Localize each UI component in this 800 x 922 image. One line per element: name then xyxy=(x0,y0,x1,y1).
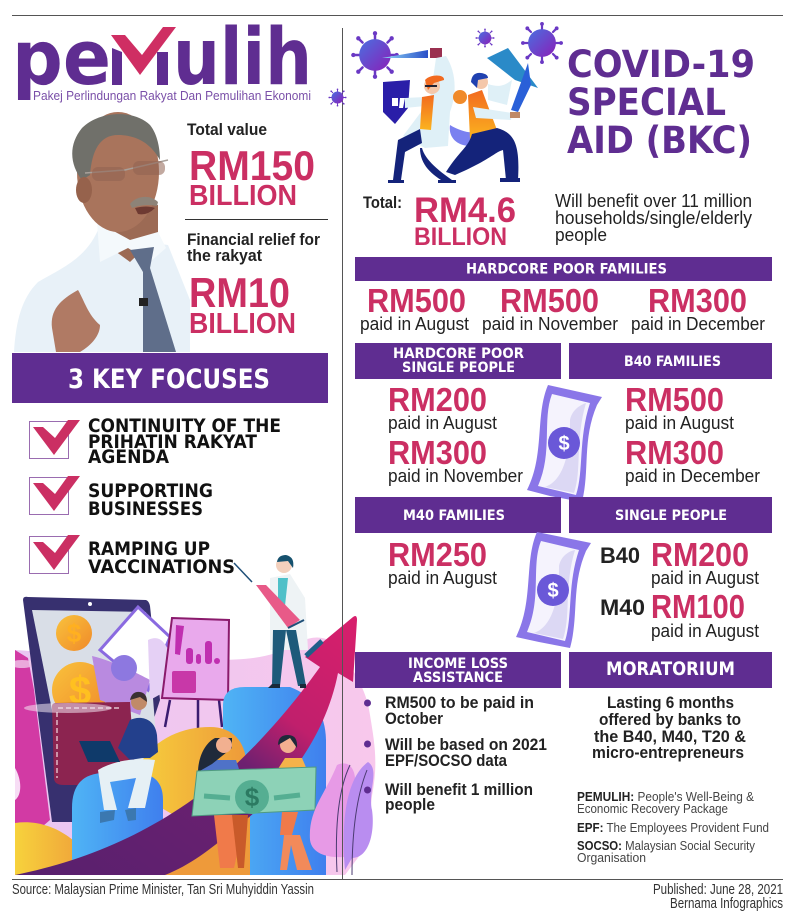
glossary xyxy=(577,789,769,865)
photo: prime minister xyxy=(14,112,190,352)
panel: hardcore poor single people: paid in August xyxy=(388,413,497,433)
title xyxy=(567,43,755,162)
top rule xyxy=(12,15,783,16)
small blue block xyxy=(72,773,163,860)
panel: B40 families: paid in December xyxy=(625,466,760,486)
illustration: doctors fighting the virus xyxy=(382,48,538,183)
focus 2 xyxy=(30,476,213,520)
panel: hardcore poor families: paid in December xyxy=(631,314,765,334)
focus 2: BUSINESSES xyxy=(88,498,203,520)
glossary: SOCSO: Malaysian Social Security xyxy=(577,838,755,853)
total block xyxy=(363,191,516,251)
panel: moratorium: Lasting 6 months xyxy=(607,693,734,712)
panel: income loss assistance: EPF/SOCSO data xyxy=(385,751,507,770)
panel: income loss assistance xyxy=(355,652,561,814)
focus 1: PRIHATIN RAKYAT xyxy=(88,431,257,453)
plants xyxy=(310,763,355,857)
panel: single people: RM100 xyxy=(651,588,745,625)
glossary: PEMULIH: People's Well-Being & xyxy=(577,789,754,804)
panel: single people: paid in August xyxy=(651,568,759,588)
panel: M40 families xyxy=(355,497,561,588)
coins xyxy=(56,615,92,651)
panel: single people: RM200 xyxy=(651,536,749,573)
growth arrow xyxy=(15,616,357,875)
logo: pemulih: pe xyxy=(12,13,111,102)
panel: M40 families: M40 FAMILIES xyxy=(403,508,505,524)
panel: moratorium xyxy=(569,652,772,762)
logo: pemulih xyxy=(12,13,312,103)
financial relief block xyxy=(187,230,320,340)
panel: income loss assistance: Will benefit 1 million xyxy=(385,780,533,799)
panel: income loss assistance: ASSISTANCE xyxy=(413,670,503,686)
title: AID (BKC) xyxy=(567,119,752,162)
glossary: Organisation xyxy=(577,850,646,865)
financial relief block: the rakyat xyxy=(187,246,262,265)
wallet xyxy=(52,702,136,785)
panel: hardcore poor families: RM500 xyxy=(500,282,599,319)
panel: single people: B40 xyxy=(600,543,640,568)
glossary: EPF: The Employees Provident Fund xyxy=(577,820,769,835)
panel: M40 families: paid in August xyxy=(388,568,497,588)
panel: hardcore poor single people: RM300 xyxy=(388,434,487,471)
panel: income loss assistance: people xyxy=(385,795,435,814)
illustration: growth scene with tablet, wallet, arrow and people xyxy=(10,555,375,875)
beneficiaries text: households/single/elderly xyxy=(555,208,752,228)
financial relief block: BILLION xyxy=(189,308,296,340)
logo: pemulih: ulih xyxy=(173,13,312,103)
total block: BILLION xyxy=(414,223,507,251)
panel: hardcore poor families xyxy=(355,257,772,334)
panel: B40 families xyxy=(569,343,772,486)
total block: RM4.6 xyxy=(414,191,516,230)
focus 3 xyxy=(30,535,235,578)
panel: moratorium: the B40, M40, T20 & xyxy=(594,727,746,746)
publication credit xyxy=(653,882,783,912)
yellow hill xyxy=(143,727,246,814)
icon: banknote 2 xyxy=(516,532,591,648)
panel: B40 families: RM300 xyxy=(625,434,724,471)
panel: hardcore poor families: paid in November xyxy=(482,314,618,334)
panel: hardcore poor families: RM300 xyxy=(648,282,747,319)
panel: M40 families: RM250 xyxy=(388,536,487,573)
panel: moratorium: offered by banks to xyxy=(599,710,741,729)
panel: hardcore poor single people: paid in November xyxy=(388,466,523,486)
panel: single people: SINGLE PEOPLE xyxy=(615,508,727,524)
green banknote with two women: $ xyxy=(245,782,260,812)
icon: banknote 2: $ xyxy=(547,580,559,602)
purple banknote behind xyxy=(100,607,170,690)
panel: single people: paid in August xyxy=(651,621,759,641)
panel: income loss assistance: INCOME LOSS xyxy=(408,656,508,672)
doctor with syringe xyxy=(234,555,308,688)
panel: hardcore poor single people xyxy=(355,343,561,486)
panel: income loss assistance: RM500 to be paid in xyxy=(385,693,534,712)
laptop man xyxy=(79,692,158,823)
source: Source: Malaysian Prime Minister, Tan Sri Muhyiddin Yassin xyxy=(12,882,314,898)
illustration: growth scene with tablet, wallet, arrow and people: $ xyxy=(69,669,91,713)
panel: moratorium: MORATORIUM xyxy=(606,659,735,680)
panel: moratorium: micro-entrepreneurs xyxy=(592,743,744,762)
heading bar: 3 key focuses xyxy=(12,353,328,403)
financial relief block: RM10 xyxy=(189,269,290,316)
tablet xyxy=(23,597,160,822)
panel: B40 families: RM500 xyxy=(625,381,724,418)
focus 1: AGENDA xyxy=(88,446,169,468)
title: SPECIAL xyxy=(567,81,726,124)
illustration: growth scene with tablet, wallet, arrow and people: $ xyxy=(67,618,82,648)
icon: banknote 1 xyxy=(527,385,602,502)
focus 2: SUPPORTING xyxy=(88,480,213,502)
focus 3: RAMPING UP xyxy=(88,538,210,560)
beneficiaries text: Will benefit over 11 million xyxy=(555,191,752,211)
panel: hardcore poor families: paid in August xyxy=(360,314,469,334)
panel: income loss assistance: October xyxy=(385,709,443,728)
focus 1: CONTINUITY OF THE xyxy=(88,415,281,437)
total value block: RM150 xyxy=(189,142,315,189)
blue block xyxy=(223,687,326,875)
panel: income loss assistance: Will be based on 2021 xyxy=(385,735,547,754)
panel: hardcore poor single people: RM200 xyxy=(388,381,487,418)
divider xyxy=(185,219,328,220)
panel: single people xyxy=(569,497,772,641)
title: COVID-19 xyxy=(567,43,755,86)
glossary: Economic Recovery Package xyxy=(577,801,728,816)
focus 3: VACCINATIONS xyxy=(88,556,235,578)
bottom rule xyxy=(12,879,783,880)
panel: single people: M40 xyxy=(600,595,645,620)
panel: B40 families: B40 FAMILIES xyxy=(624,354,721,370)
total block: Total: xyxy=(363,193,402,212)
panel: B40 families: paid in August xyxy=(625,413,734,433)
panel: hardcore poor single people: HARDCORE POOR xyxy=(393,346,524,362)
logo: pemulih: Pakej Perlindungan Rakyat Dan Pemulihan Ekonomi xyxy=(33,88,311,103)
panel: hardcore poor families: HARDCORE POOR FAMILIES xyxy=(466,262,667,278)
column divider xyxy=(342,28,343,879)
heading bar: 3 key focuses: 3 KEY FOCUSES xyxy=(68,364,270,395)
total value block: Total value xyxy=(187,120,267,139)
financial relief block: Financial relief for xyxy=(187,230,320,249)
panel: hardcore poor families: RM500 xyxy=(367,282,466,319)
total value block: BILLION xyxy=(189,180,297,212)
icons: virus particles xyxy=(328,22,563,107)
easel chart xyxy=(162,618,229,728)
beneficiaries text: people xyxy=(555,225,607,245)
panel: hardcore poor single people: SINGLE PEOPLE xyxy=(402,360,515,376)
focus 1 xyxy=(30,415,281,468)
icon: banknote 1: $ xyxy=(558,433,570,455)
beneficiaries text xyxy=(555,191,752,245)
green banknote with two women xyxy=(192,735,316,870)
total value block xyxy=(187,120,315,212)
